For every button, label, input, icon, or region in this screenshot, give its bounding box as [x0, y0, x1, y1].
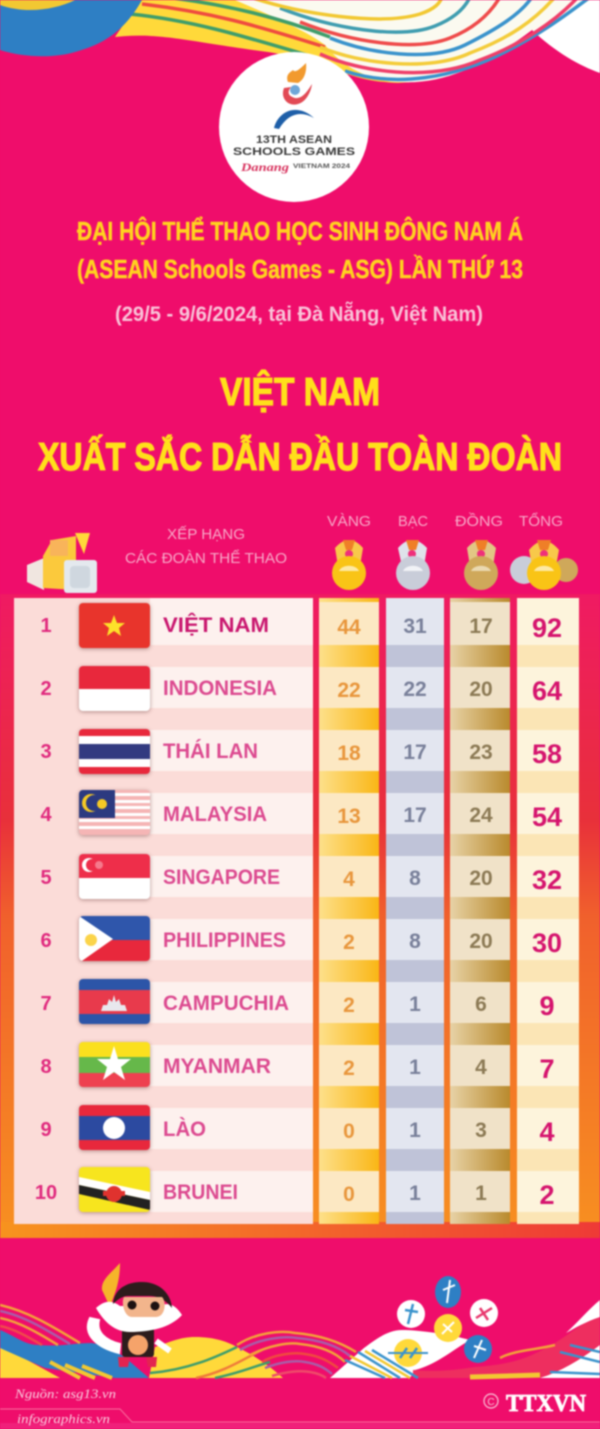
top decorative waves: [0, 0, 600, 83]
row 4: Malaysia: 4: [40, 804, 52, 826]
row 1: Việt Nam: 1: [40, 615, 52, 637]
row 9: Lào: 3: [475, 1119, 487, 1142]
sport icons: [388, 1276, 498, 1367]
row 2: Indonesia: 20: [469, 678, 493, 701]
row 5: Singapore: 32: [532, 865, 562, 895]
column heading: ranking: XẾP HẠNG: [167, 526, 245, 543]
row 4: Malaysia: MALAYSIA: [163, 803, 267, 826]
torch: [102, 1263, 120, 1307]
row 5: Singapore: 20: [469, 867, 493, 890]
logo badge: [219, 52, 369, 202]
row 2: Indonesia: INDONESIA: [163, 677, 277, 700]
flag: Thailand: [79, 729, 150, 774]
row 10: Brunei: 2: [539, 1180, 555, 1210]
row 4: Malaysia: 24: [469, 804, 493, 827]
row 7: Campuchia: 1: [409, 993, 421, 1016]
flag: Philippines: [79, 916, 150, 964]
flag: Laos: [79, 1105, 150, 1150]
row 6: Philippines: 8: [409, 930, 421, 953]
row 7: Campuchia: [40, 979, 555, 1024]
headline: [38, 370, 562, 479]
row 8: Myanmar: 1: [409, 1056, 421, 1079]
row 1: Việt Nam: [40, 603, 562, 648]
icon: bronze medal: [464, 540, 498, 590]
row 6: Philippines: 30: [532, 928, 562, 958]
row 7: Campuchia: 2: [343, 994, 355, 1017]
row 7: Campuchia: 6: [475, 993, 487, 1016]
column heading: ranking: CÁC ĐOÀN THỂ THAO: [125, 549, 287, 567]
flag: Brunei: [79, 1167, 150, 1212]
head: [96, 1282, 182, 1332]
row 9: Lào: LÀO: [163, 1118, 206, 1141]
row 5: Singapore: [40, 854, 562, 899]
row 10: Brunei: 0: [343, 1183, 355, 1206]
row 6: Philippines: 6: [40, 930, 52, 952]
flag: Singapore: [79, 854, 150, 899]
row 9: Lào: 4: [539, 1117, 555, 1147]
flag: Cambodia: [79, 979, 150, 1024]
row 5: Singapore: 8: [409, 867, 421, 890]
icon: gold medal: [332, 540, 366, 590]
row 2: Indonesia: 22: [403, 678, 427, 701]
row 6: Philippines: [40, 916, 562, 964]
row 8: Myanmar: 8: [40, 1056, 52, 1078]
row 2: Indonesia: [40, 666, 562, 711]
row 3: Thái Lan: 23: [469, 741, 493, 764]
row 8: Myanmar: MYANMAR: [163, 1055, 271, 1078]
column headings: medals: TỔNG: [519, 512, 563, 530]
row 1: Việt Nam: 44: [337, 616, 361, 639]
row 2: Indonesia: 2: [40, 678, 52, 700]
row 10: Brunei: 1: [475, 1182, 487, 1205]
row 3: Thái Lan: 58: [532, 739, 562, 769]
row 4: Malaysia: 13: [337, 805, 361, 828]
column headings: medals: ĐỒNG: [455, 512, 503, 530]
icon: podium: [27, 533, 97, 593]
row 8: Myanmar: 2: [343, 1057, 355, 1080]
row 3: Thái Lan: 18: [337, 742, 361, 765]
row 6: Philippines: PHILIPPINES: [163, 929, 286, 952]
row 10: Brunei: 1: [409, 1182, 421, 1205]
row 7: Campuchia: 7: [40, 993, 52, 1015]
row 1: Việt Nam: 17: [469, 615, 493, 638]
table panel: [0, 594, 600, 1238]
column headings: medals: BẠC: [398, 513, 428, 530]
icon: silver medal: [396, 540, 430, 590]
row 9: Lào: [40, 1105, 555, 1150]
row 6: Philippines: 20: [469, 930, 493, 953]
column headings: medals: VÀNG: [327, 513, 371, 530]
row 9: Lào: 0: [343, 1120, 355, 1143]
icon: medal cluster: [510, 540, 578, 590]
row 4: Malaysia: 17: [403, 804, 427, 827]
logo: wordmark: 13TH ASEAN: [256, 134, 332, 146]
flag: Malaysia: [79, 790, 150, 835]
row 1: Việt Nam: 92: [532, 613, 562, 643]
row 9: Lào: 1: [409, 1119, 421, 1142]
headline: VIỆT NAM: [220, 370, 380, 414]
column heading: ranking: [125, 526, 287, 567]
row 8: Myanmar: [40, 1042, 555, 1089]
row 10: Brunei: BRUNEI: [163, 1181, 238, 1204]
column headings: medals: [327, 512, 563, 530]
row 8: Myanmar: 4: [475, 1056, 487, 1079]
source: Nguồn: asg13.vn: [14, 1386, 116, 1401]
mascot with torch: [88, 1263, 182, 1367]
flag: Vietnam: [79, 603, 150, 648]
bottom decorative waves: [0, 1300, 600, 1378]
logo: torch figure: [274, 63, 314, 129]
logo: wordmark: VIETNAM 2024: [293, 164, 351, 170]
row 4: Malaysia: [40, 790, 562, 835]
row 1: Việt Nam: VIỆT NAM: [163, 613, 269, 637]
row bands: [150, 598, 579, 1212]
row 2: Indonesia: 64: [532, 676, 562, 706]
row 3: Thái Lan: THÁI LAN: [163, 740, 258, 763]
tail: [88, 1318, 120, 1353]
flag: Indonesia: [79, 666, 150, 711]
agency logo: C: [487, 1397, 495, 1408]
row 5: Singapore: SINGAPORE: [163, 866, 280, 889]
row 10: Brunei: 10: [35, 1182, 57, 1204]
logo: wordmark: [233, 134, 355, 174]
row 10: Brunei: [35, 1167, 555, 1212]
event date and place: (29/5 - 9/6/2024, tại Đà Nẵng, Việt Nam): [115, 302, 483, 326]
row 1: Việt Nam: 31: [403, 615, 427, 638]
website tab: infographics.vn: [17, 1411, 110, 1426]
logo: wordmark: SCHOOLS GAMES: [233, 146, 355, 158]
row 7: Campuchia: CAMPUCHIA: [163, 992, 289, 1015]
logo: wordmark: Danang: [240, 160, 289, 174]
row 2: Indonesia: 22: [337, 679, 361, 702]
body: [118, 1328, 170, 1367]
website tab: [0, 1409, 600, 1429]
row 9: Lào: 9: [40, 1119, 52, 1141]
event title: [77, 216, 523, 284]
row 3: Thái Lan: [40, 729, 562, 774]
row 4: Malaysia: 54: [532, 802, 562, 832]
row 3: Thái Lan: 3: [40, 741, 52, 763]
row 6: Philippines: 2: [343, 931, 355, 954]
row 3: Thái Lan: 17: [403, 741, 427, 764]
flag: Myanmar: [79, 1042, 150, 1089]
row 5: Singapore: 5: [40, 867, 52, 889]
row 5: Singapore: 4: [343, 868, 355, 891]
row 7: Campuchia: 9: [539, 991, 555, 1021]
agency logo: TTXVN: [506, 1391, 587, 1417]
row 8: Myanmar: 7: [539, 1054, 555, 1084]
